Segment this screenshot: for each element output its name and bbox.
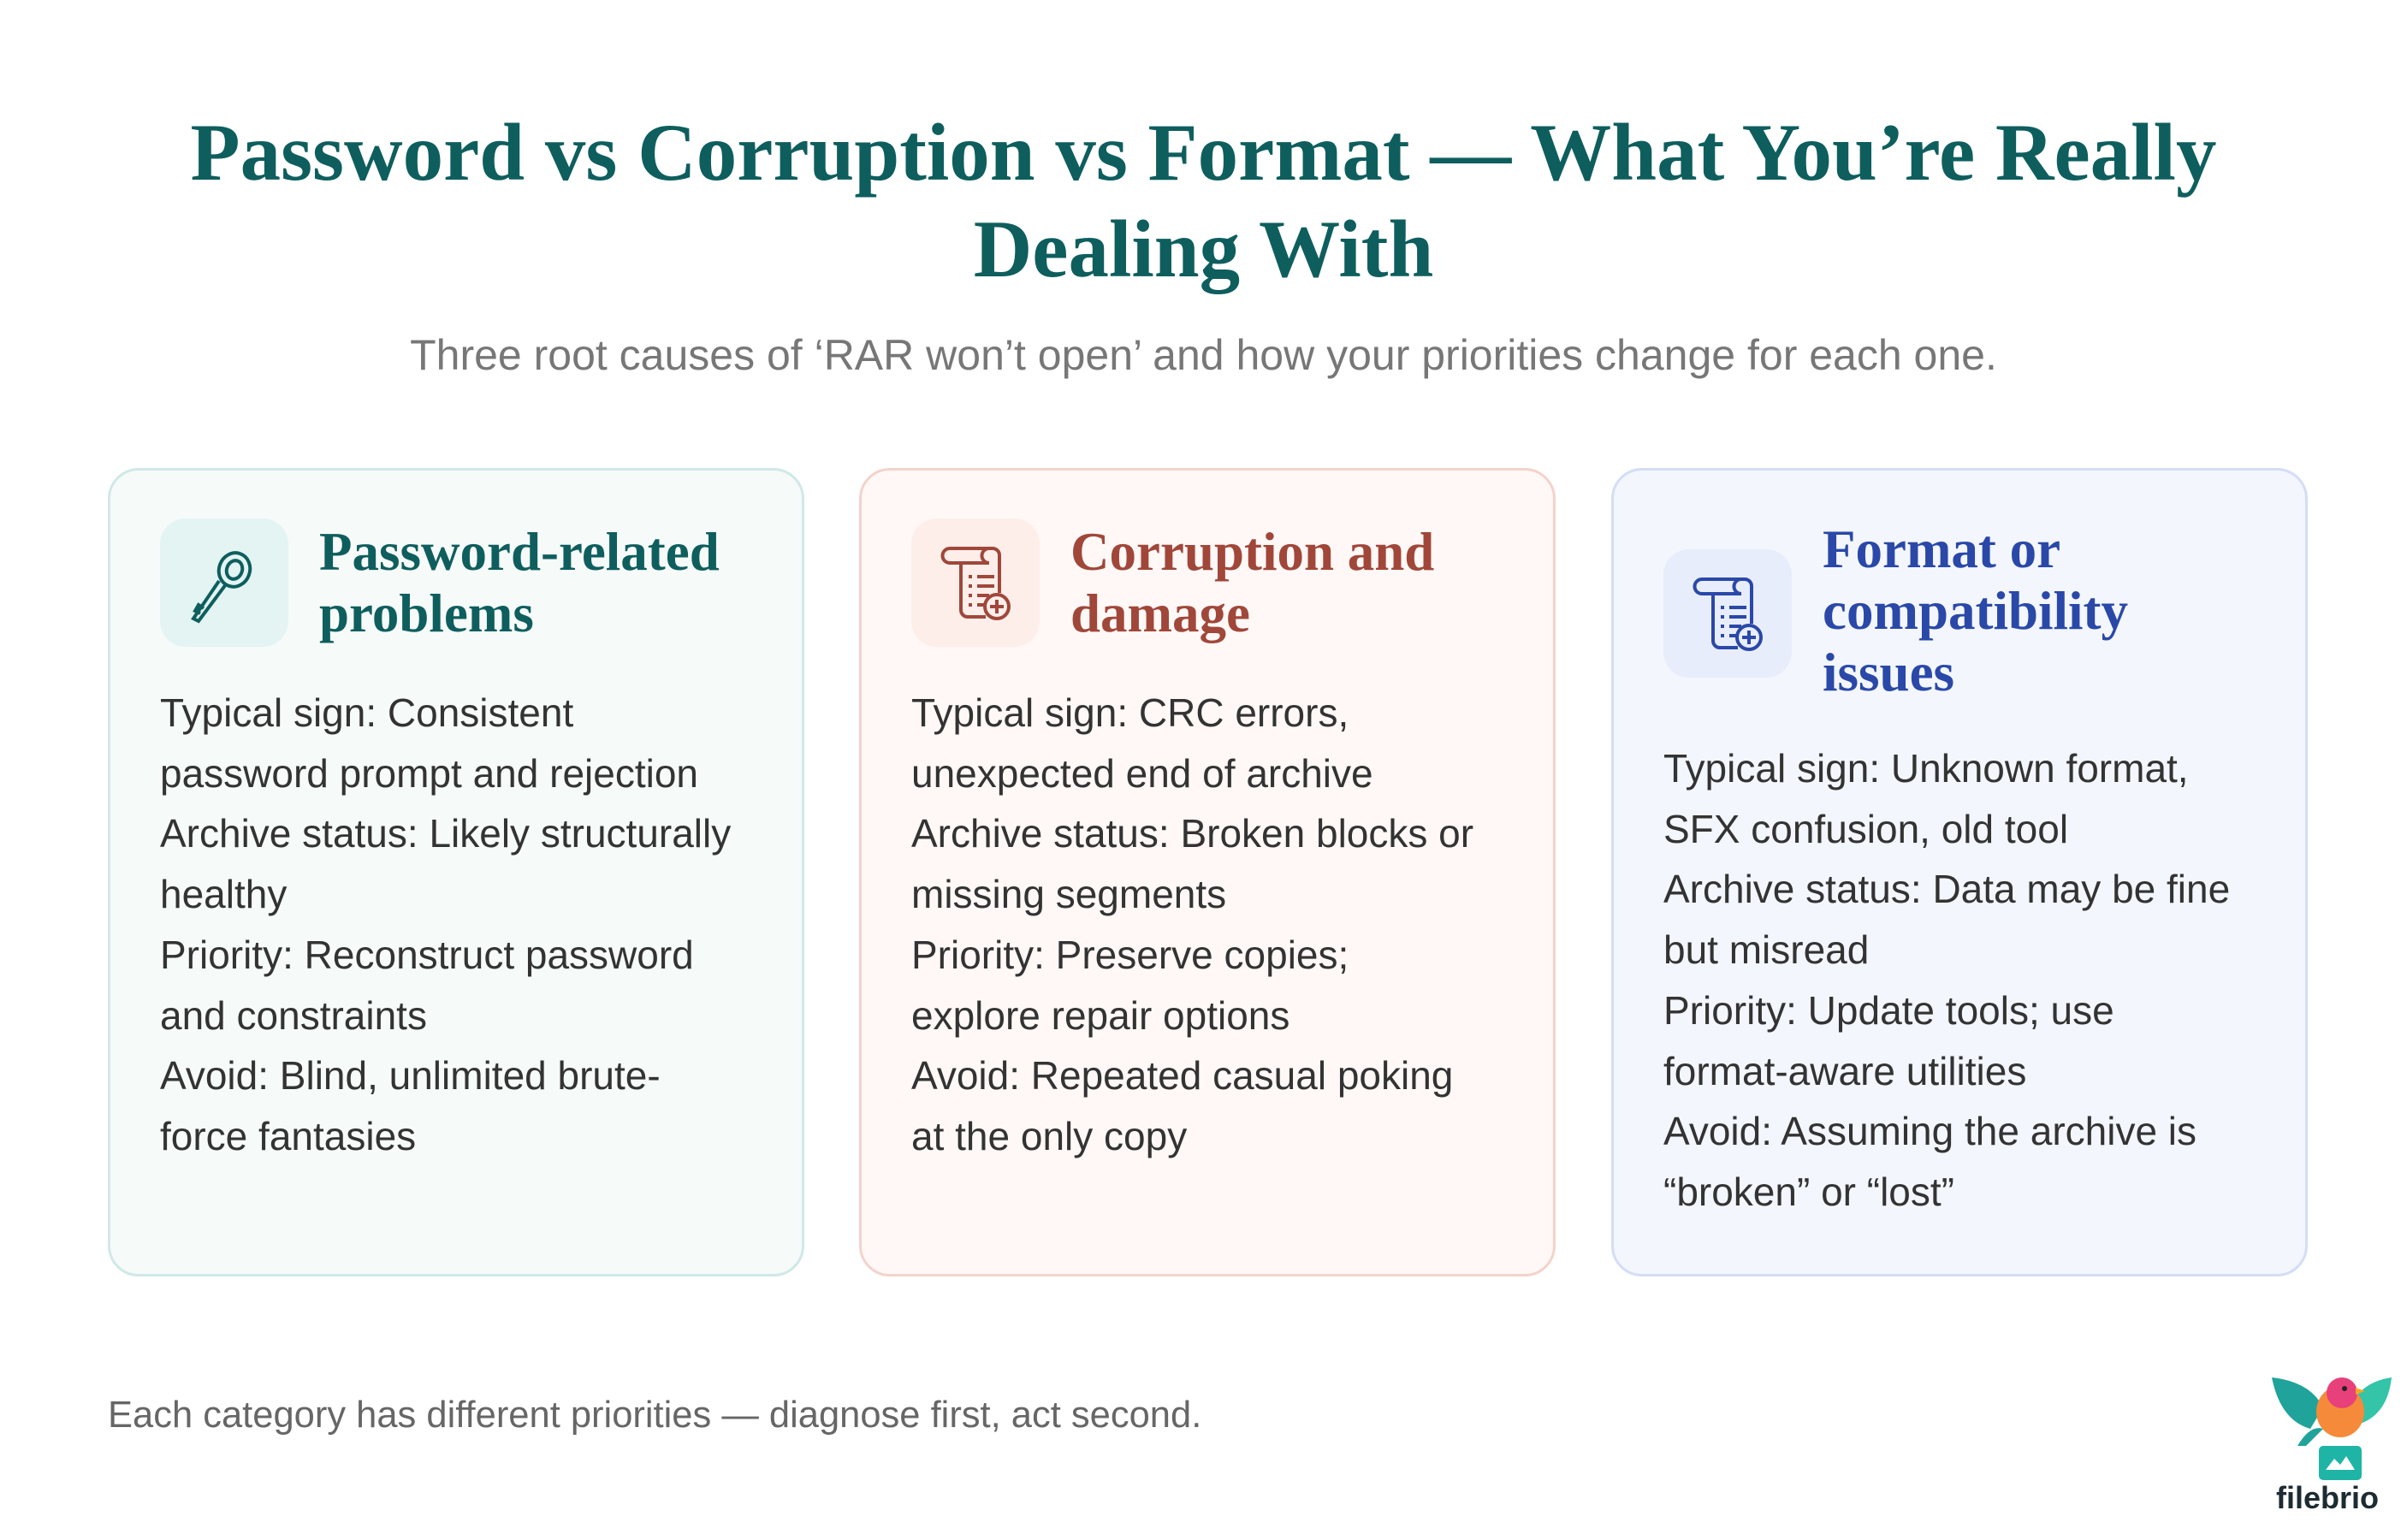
subtitle: Three root causes of ‘RAR won’t open’ and how your priorities change for each one. [410, 331, 1997, 379]
text block: unexpected end of archive [911, 751, 1373, 796]
text block: Priority: Reconstruct password [160, 933, 694, 977]
text block: Typical sign: Consistent [160, 690, 573, 735]
text block [160, 690, 731, 1158]
heading [319, 522, 720, 643]
icon: scroll [1663, 549, 1792, 678]
text block [1663, 746, 2230, 1214]
text block: missing segments [911, 872, 1226, 916]
text block: force fantasies [160, 1114, 416, 1158]
logo: filebrio [2272, 1377, 2392, 1515]
panel: password [108, 468, 804, 1276]
heading [1823, 519, 2128, 702]
text block: and constraints [160, 993, 427, 1038]
text block: Priority: Update tools; use [1663, 988, 2114, 1033]
text block: but misread [1663, 927, 1869, 972]
text block: Priority: Preserve copies; [911, 933, 1349, 977]
text block: SFX confusion, old tool [1663, 807, 2068, 851]
title: Password vs Corruption vs Format — What You’re Really [191, 107, 2216, 198]
heading: Format or [1823, 519, 2060, 579]
heading: damage [1070, 583, 1250, 643]
heading: problems [319, 583, 534, 643]
text block: format-aware utilities [1663, 1049, 2026, 1093]
title: Dealing With [974, 204, 1433, 294]
heading: compatibility [1823, 581, 2128, 641]
icon: key [160, 518, 288, 647]
text block: Avoid: Blind, unlimited brute- [160, 1053, 661, 1098]
text block: Archive status: Data may be fine [1663, 867, 2230, 911]
heading: Corruption and [1070, 522, 1434, 582]
text block: Typical sign: CRC errors, [911, 690, 1349, 735]
text block: Archive status: Broken blocks or [911, 811, 1473, 856]
heading: Password-related [319, 522, 720, 582]
text block: explore repair options [911, 993, 1289, 1038]
text block: healthy [160, 872, 287, 916]
text block: Archive status: Likely structurally [160, 811, 731, 856]
title [191, 107, 2216, 294]
footer note: Each category has different priorities — diagnose first, act second. [108, 1395, 1201, 1436]
text block: password prompt and rejection [160, 751, 698, 796]
heading: issues [1823, 643, 1954, 702]
heading [1070, 522, 1434, 643]
logo: filebrio: filebrio [2276, 1480, 2379, 1515]
panel: corruption [859, 468, 1556, 1276]
text block: Typical sign: Unknown format, [1663, 746, 2189, 791]
text block: Avoid: Repeated casual poking [911, 1053, 1453, 1098]
text block: “broken” or “lost” [1663, 1170, 1954, 1214]
text block: at the only copy [911, 1114, 1187, 1158]
text block: Avoid: Assuming the archive is [1663, 1109, 2197, 1153]
icon: scroll [911, 518, 1040, 647]
panel: format [1611, 468, 2308, 1276]
text block [911, 690, 1473, 1158]
